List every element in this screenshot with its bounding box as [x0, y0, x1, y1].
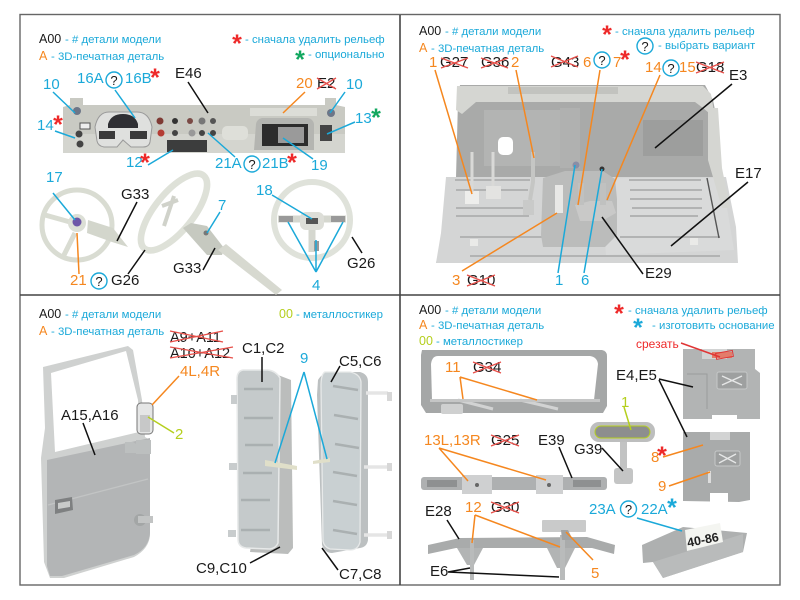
legend: dashboard panel: - # детали модели — [65, 34, 161, 46]
legend: parts panel: - сначала удалить рельеф — [628, 305, 768, 317]
labels: door: C5,C6 — [339, 353, 382, 370]
leader lines: parts — [439, 343, 733, 577]
labels: parts: G25 — [491, 432, 519, 449]
legend: dashboard panel: - 3D-печатная деталь — [51, 51, 164, 63]
legend: door panel: - # детали модели — [65, 309, 161, 321]
labels: cab: * — [620, 46, 630, 74]
labels: dashboard: 17 — [46, 169, 63, 186]
labels: door — [61, 330, 382, 583]
labels: dashboard: 21B — [262, 155, 289, 172]
legend: cab panel: - сначала удалить рельеф — [615, 26, 755, 38]
labels: cab: 6 — [581, 272, 589, 289]
labels: parts: E4,E5 — [616, 367, 657, 384]
legend: parts panel: - изготовить основание — [652, 320, 775, 332]
legend: dashboard panel: * — [295, 46, 305, 74]
labels: dashboard: G33 — [173, 260, 201, 277]
legend: dashboard panel: - опционально — [308, 49, 385, 61]
windscreen illustration — [421, 350, 607, 414]
legend: parts panel: - металлостикер — [436, 336, 523, 348]
labels: dashboard: 10 — [43, 76, 60, 93]
vent panel left — [228, 370, 297, 554]
labels: door: 2 — [175, 426, 183, 443]
labels: cab: E29 — [645, 265, 672, 282]
labels: dashboard: 7 — [218, 197, 226, 214]
labels: dashboard: * — [287, 149, 297, 177]
labels: parts: * — [667, 494, 677, 522]
labels: dashboard — [37, 64, 381, 294]
legend: dashboard panel — [39, 30, 385, 74]
labels: dashboard: G26 — [347, 255, 375, 272]
labels: parts: 23A — [589, 501, 616, 518]
rear-view mirror G39 — [590, 422, 655, 484]
labels: dashboard: * — [140, 149, 150, 177]
labels: cab: 15 — [679, 59, 696, 76]
labels: dashboard: 20 — [296, 75, 313, 92]
legend: cab panel: - выбрать вариант — [658, 40, 756, 52]
labels: door: A15,A16 — [61, 407, 119, 424]
legend: door panel: A00 — [39, 307, 61, 321]
part E4,E5 lower — [683, 432, 750, 502]
labels: parts: 8 — [651, 449, 659, 466]
legend: cab panel: - 3D-печатная деталь — [431, 43, 544, 55]
steering wheel right — [274, 182, 350, 258]
labels: door: A9+A11 — [170, 330, 221, 346]
labels: parts: срезать — [636, 337, 679, 351]
labels: dashboard: ? — [248, 157, 256, 172]
labels: cab: 7 — [613, 54, 621, 71]
steering wheel left — [42, 190, 128, 260]
legend: door panel: - металлостикер — [296, 309, 383, 321]
labels: parts — [424, 337, 679, 582]
labels: dashboard: 19 — [311, 157, 328, 174]
labels: parts: 13L,13R — [424, 432, 481, 449]
legend: parts panel: A00 — [419, 303, 441, 317]
legend: parts panel: * — [614, 300, 624, 328]
labels: door: A10+A12 — [170, 346, 230, 362]
legend: dashboard panel: * — [232, 30, 242, 58]
legend: door panel: - 3D-печатная деталь — [51, 326, 164, 338]
legend: parts panel: * — [633, 314, 643, 342]
labels: parts: 1 — [621, 394, 629, 411]
labels: dashboard: 10 — [346, 76, 363, 93]
legend: cab panel: A — [419, 41, 428, 55]
labels: cab: 2 — [511, 54, 519, 71]
licence plate illustration — [642, 523, 747, 578]
labels: dashboard: * — [371, 104, 381, 132]
labels: dashboard: 16A — [77, 70, 104, 87]
dashboard illustration — [63, 98, 345, 153]
panel: cab interior — [419, 21, 762, 289]
labels: door: C9,C10 — [196, 560, 247, 577]
cab interior illustration — [436, 85, 738, 263]
steering wheel middle with column — [130, 164, 282, 295]
vent panel right — [313, 372, 392, 553]
legend: cab panel: * — [602, 21, 612, 49]
labels: parts: 11 — [445, 359, 461, 376]
labels: dashboard: E2 — [317, 75, 335, 92]
labels: dashboard: 18 — [256, 182, 273, 199]
labels: cab: 6 — [583, 54, 591, 71]
panel: door and vents — [39, 307, 392, 583]
legend: door panel — [39, 307, 383, 338]
legend: parts panel: A — [419, 318, 428, 332]
labels: parts: * — [657, 442, 667, 470]
labels: dashboard: 21 — [70, 272, 87, 289]
legend: dashboard panel: A — [39, 49, 48, 63]
panel: windscreen, bumper, licence plate — [419, 300, 775, 582]
labels: cab: 1 — [555, 272, 563, 289]
labels: dashboard: ? — [95, 274, 103, 289]
labels: cab: G18 — [696, 59, 724, 76]
labels: cab: 14 — [645, 59, 662, 76]
legend: cab panel — [419, 21, 756, 55]
labels: cab: E17 — [735, 165, 762, 182]
labels: cab: E3 — [729, 67, 747, 84]
labels: parts: E6 — [430, 563, 448, 580]
part E4,E5 upper — [683, 349, 760, 420]
labels: cab: 3 — [452, 272, 460, 289]
legend: door panel: A — [39, 324, 48, 338]
labels: parts: 9 — [658, 478, 666, 495]
labels: dashboard: 13 — [355, 110, 372, 127]
legend: parts panel: - 3D-печатная деталь — [431, 320, 544, 332]
labels: dashboard: * — [150, 64, 160, 92]
legend: cab panel: - # детали модели — [445, 26, 541, 38]
legend: dashboard panel: - сначала удалить рельеф — [245, 34, 385, 46]
labels: cab — [429, 46, 762, 289]
labels: door: C7,C8 — [339, 566, 382, 583]
legend: cab panel: A00 — [419, 24, 441, 38]
legend: parts panel — [419, 300, 775, 348]
labels: parts: 22A — [641, 501, 668, 518]
labels: door: 9 — [300, 350, 308, 367]
labels: cab: G36 — [481, 54, 509, 71]
labels: cab: ? — [667, 61, 675, 76]
labels: cab: ? — [598, 53, 606, 68]
door illustration — [41, 346, 153, 578]
labels: door: C1,C2 — [242, 340, 285, 357]
labels: dashboard: G33 — [121, 186, 149, 203]
labels: dashboard: 14 — [37, 117, 54, 134]
labels: dashboard: 21A — [215, 155, 242, 172]
labels: dashboard: ? — [110, 73, 118, 88]
labels: dashboard: E46 — [175, 65, 202, 82]
licence plate illustration: 40-86 — [686, 530, 720, 550]
labels: cab: G27 — [440, 54, 468, 71]
bar part illustration — [421, 475, 607, 494]
legend: parts panel: 00 — [419, 334, 433, 348]
legend: parts panel: - # детали модели — [445, 305, 541, 317]
labels: cab: G43 — [551, 54, 579, 71]
panel: dashboard and steering wheels — [37, 30, 385, 295]
labels: parts: G39 — [574, 441, 602, 458]
labels: dashboard: 4 — [312, 277, 320, 294]
leader lines: door — [83, 357, 340, 570]
labels: cab: 1 — [429, 54, 437, 71]
labels: dashboard: 12 — [126, 154, 143, 171]
labels: door: 4L,4R — [180, 363, 220, 380]
legend: dashboard panel: A00 — [39, 32, 61, 46]
legend: door panel: 00 — [279, 307, 293, 321]
labels: parts: ? — [625, 502, 632, 517]
labels: parts: G34 — [473, 359, 501, 376]
bumper illustration — [428, 520, 615, 580]
labels: dashboard: * — [53, 111, 63, 139]
labels: parts: 12 — [465, 499, 482, 516]
leader lines: cab — [435, 70, 748, 274]
labels: parts: G30 — [491, 499, 519, 516]
leader lines: dashboard — [53, 82, 362, 274]
labels: cab: G10 — [467, 272, 495, 289]
labels: dashboard: G26 — [111, 272, 139, 289]
labels: parts: E39 — [538, 432, 565, 449]
legend: cab panel: ? — [641, 39, 649, 54]
labels: dashboard: 16B — [125, 70, 152, 87]
labels: parts: E28 — [425, 503, 452, 520]
labels: parts: 5 — [591, 565, 599, 582]
